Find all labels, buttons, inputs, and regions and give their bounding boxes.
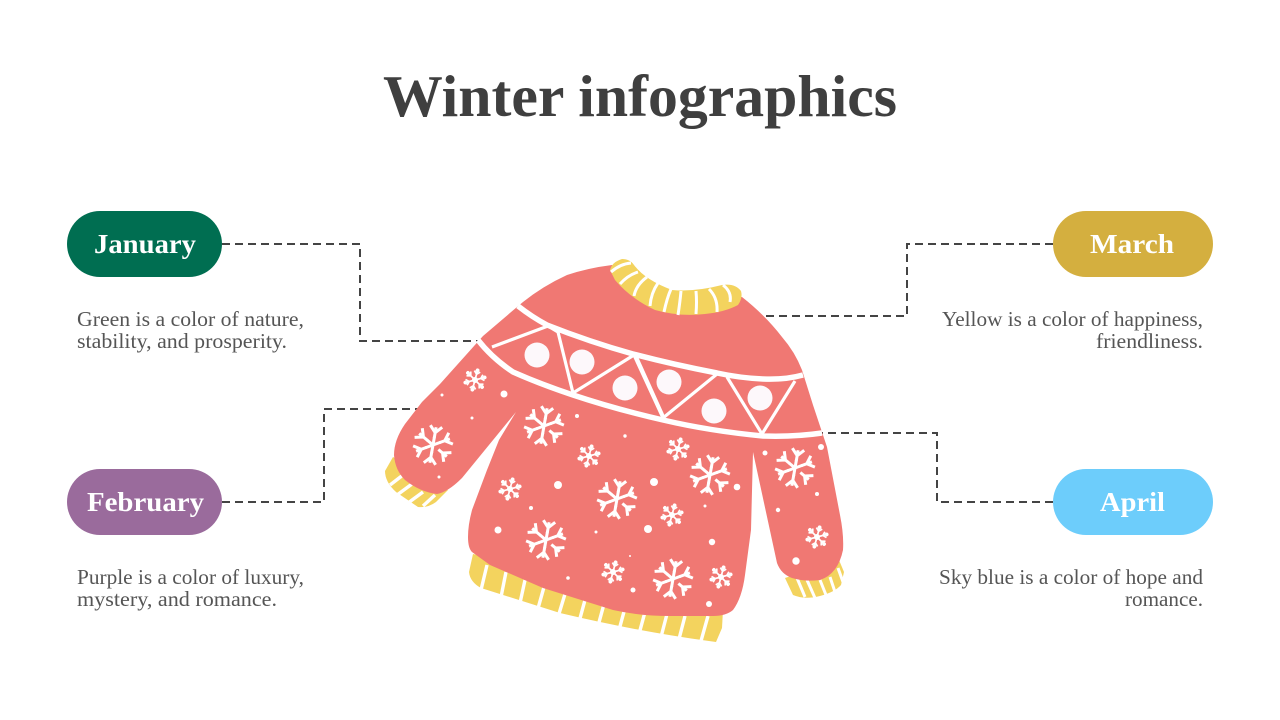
text: February description: Purple is a color of luxury,: [77, 565, 304, 589]
pill: February: [67, 469, 222, 535]
right cuff: [785, 560, 844, 598]
panel: February: [67, 469, 304, 611]
pill: March: [1053, 211, 1213, 277]
hem: [469, 554, 723, 642]
text: March description: [942, 307, 1203, 353]
pill: April: [1053, 469, 1213, 535]
left cuff: [385, 457, 448, 507]
yoke pattern: [478, 306, 822, 436]
text: February description: mystery, and romance.: [77, 587, 277, 611]
connector: February: [222, 409, 420, 502]
connector: January: [222, 244, 478, 341]
pill: March: March: [1090, 229, 1174, 259]
panel: January: [67, 211, 304, 353]
text: March description: friendliness.: [1096, 329, 1203, 353]
pill: January: January: [94, 229, 197, 259]
title: Winter infographics: [383, 63, 897, 129]
text: January description: [77, 307, 304, 353]
snowflakes: [411, 365, 831, 601]
panel: April: [939, 469, 1213, 611]
pill: January: [67, 211, 222, 277]
text: March description: Yellow is a color of happiness,: [942, 307, 1203, 331]
collar: [610, 259, 742, 315]
text: April description: [939, 565, 1203, 611]
text: April description: Sky blue is a color of hope and: [939, 565, 1203, 589]
sweater illustration: [385, 259, 844, 642]
text: January description: Green is a color of nature,: [77, 307, 304, 331]
panel: March: [942, 211, 1213, 353]
text: February description: [77, 565, 304, 611]
connector: March: [764, 244, 1053, 316]
text: January description: stability, and prosperity.: [77, 329, 287, 353]
sweater body: [394, 265, 843, 616]
connector: April: [822, 433, 1053, 502]
text: April description: romance.: [1125, 587, 1203, 611]
pill: April: April: [1100, 487, 1166, 517]
snow dots: [438, 390, 824, 607]
pill: February: February: [87, 487, 205, 517]
